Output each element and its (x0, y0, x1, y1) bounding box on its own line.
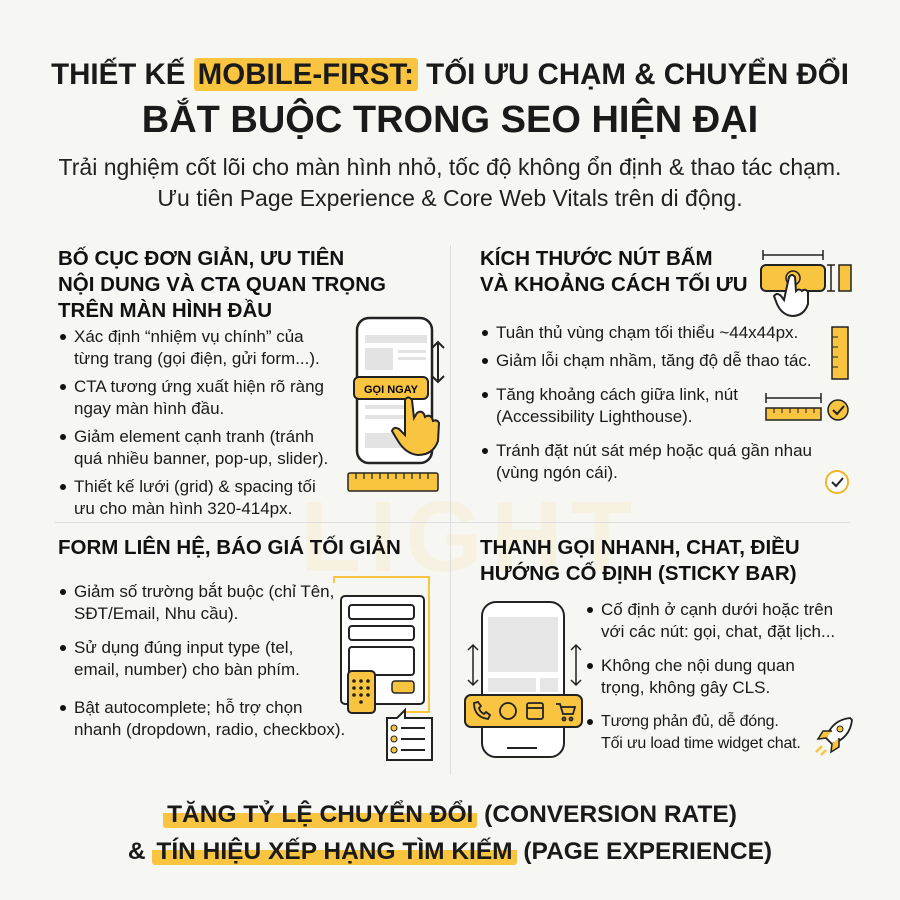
title (51, 58, 849, 141)
title: BẮT BUỘC TRONG SEO HIỆN ĐẠI (142, 99, 758, 141)
heading: FORM LIÊN HỆ, BÁO GIÁ TỐI GIẢN (58, 536, 401, 559)
footer: & TÍN HIỆU XẾP HẠNG TÌM KIẾM (PAGE EXPERIENCE) (128, 838, 772, 865)
icon: rocket (815, 717, 853, 756)
bullets: Tối ưu load time widget chat. (601, 735, 801, 752)
watermark: LIGHT (300, 481, 640, 593)
heading: BỐ CỤC ĐƠN GIẢN, ƯU TIÊN (58, 247, 344, 270)
footer: TĂNG TỶ LỆ CHUYỂN ĐỔI (CONVERSION RATE) (167, 801, 737, 828)
icon: phone with CTA: GỌI NGAY (364, 384, 419, 396)
bullets: Không che nội dung quan trọng, không gây CLS. (601, 656, 795, 697)
panel: layout (58, 246, 386, 518)
icon: ruler vertical (831, 326, 849, 380)
heading: VÀ KHOẢNG CÁCH TỐI ƯU (480, 273, 748, 296)
heading (58, 246, 386, 322)
icon: phone with CTA (347, 316, 445, 492)
heading: TRÊN MÀN HÌNH ĐẦU (58, 299, 272, 322)
bullets: CTA tương ứng xuất hiện rõ ràng ngay màn hình đầu. (74, 377, 324, 418)
heading (480, 536, 800, 585)
panel: form (58, 536, 401, 739)
bullets (60, 327, 328, 518)
bullets: Giảm số trường bắt buộc (chỉ Tên, SĐT/Email, Nhu cầu). (74, 582, 334, 623)
bullets: Tuân thủ vùng chạm tối thiểu ~44x44px. (496, 323, 798, 342)
heading (480, 246, 748, 296)
panel: sticky bar (480, 536, 835, 752)
bullets: Sử dụng đúng input type (tel, email, number) cho bàn phím. (74, 638, 300, 679)
footer (128, 800, 772, 865)
title: THIẾT KẾ MOBILE-FIRST: TỐI ƯU CHẠM & CHUYỂN ĐỔI (51, 58, 849, 91)
subtitle: Ưu tiên Page Experience & Core Web Vitals trên di động. (157, 185, 743, 211)
heading: KÍCH THƯỚC NÚT BẤM (480, 247, 713, 270)
icon: phone sticky bar (464, 601, 583, 758)
heading: NỘI DUNG VÀ CTA QUAN TRỌNG (58, 273, 386, 296)
bullets: Xác định “nhiệm vụ chính” của từng trang (gọi điện, gửi form...). (74, 327, 320, 368)
bullets: Giảm lỗi chạm nhầm, tăng độ dễ thao tác. (496, 351, 812, 370)
bullets (60, 582, 345, 739)
bullets: Bật autocomplete; hỗ trợ chọn nhanh (dropdown, radio, checkbox). (74, 698, 345, 739)
heading: HƯỚNG CỐ ĐỊNH (STICKY BAR) (480, 562, 797, 585)
bullets: Tương phản đủ, dễ đóng. (601, 713, 779, 730)
icon: form (333, 576, 433, 761)
bullets (482, 323, 812, 482)
icon: check (825, 470, 849, 494)
bullets: Tăng khoảng cách giữa link, nút (Accessibility Lighthouse). (496, 385, 738, 426)
panel: button size (480, 246, 812, 482)
bullets: Tránh đặt nút sát mép hoặc quá gần nhau (vùng ngón cái). (496, 441, 812, 482)
icon: spacing check (765, 393, 849, 421)
bullets (587, 600, 835, 752)
bullets: Giảm element cạnh tranh (tránh quá nhiều banner, pop-up, slider). (74, 427, 328, 468)
icon: button with finger (760, 250, 852, 317)
bullets: Thiết kế lưới (grid) & spacing tối ưu cho màn hình 320-414px. (74, 477, 316, 518)
bullets: Cố định ở cạnh dưới hoặc trên với các nút: gọi, chat, đặt lịch... (601, 600, 835, 641)
subtitle: Trải nghiệm cốt lõi cho màn hình nhỏ, tốc độ không ổn định & thao tác chạm. (59, 154, 841, 180)
subtitle (59, 154, 841, 211)
heading: THANH GỌI NHANH, CHAT, ĐIỀU (480, 536, 800, 559)
